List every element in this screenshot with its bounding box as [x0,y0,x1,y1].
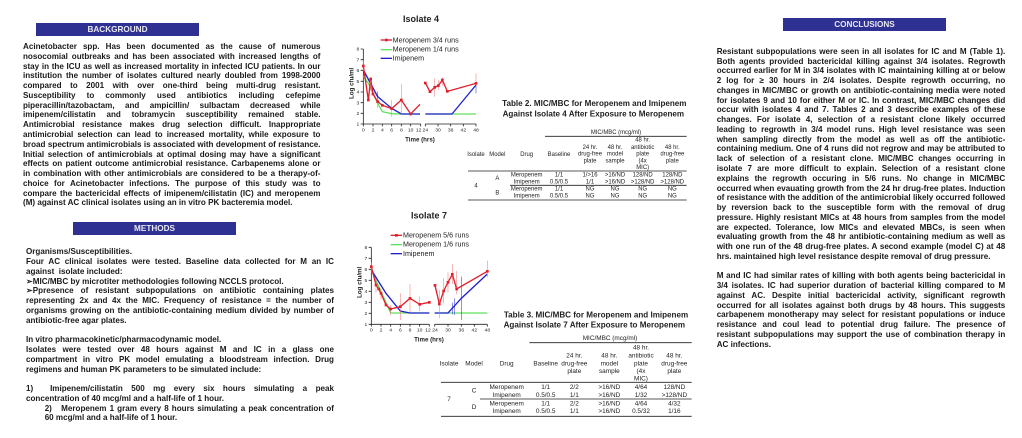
table 3 rows: Meropenem [490,401,524,408]
table 2 header: plate [584,159,597,165]
table 3 header: model [601,360,618,367]
series: meropenem 1/6 runs [371,270,487,313]
chart: isolate 4 [349,14,479,144]
table 3 title [504,311,688,330]
text block: methods: Four AC clinical isolates were tested. Baseline data collected for M an IC [26,257,334,266]
table 2 header: plate [636,152,650,158]
x tick labels: 30 [445,328,451,334]
table 3 rules [441,343,692,416]
text block: background: Initial selection of antimicrobials at optimal dosing may have a significant [23,150,320,159]
y tick labels: 1 [357,122,360,128]
table 3 title: Table 3. MIC/MBC for Meropenem and Imipenem [504,311,688,320]
x tick labels: 4 [389,328,392,334]
table 2 rows: >16/ND [605,173,625,179]
text block: background: antimicrobial selection can lead to increased mortality, while exposure to [23,130,320,139]
text block: conclusions: occurred earlier for M in 3/4 isolates with IC maintaining killing at or below [717,66,1005,75]
x tick labels: 8 [400,127,403,133]
x tick labels: 12 [425,328,431,334]
table 2 rows: >128/ND [661,179,684,185]
text block: methods: antibiotic-free agar plates. [26,316,127,325]
table 3 header: Isolate [440,360,459,367]
table 2 rows: Imipenem [514,179,540,185]
table 3 rows: 1/1 [570,408,579,415]
text block: background: Antimicrobial resistance makes drug selection difficult. Inappropriate [23,120,320,129]
table 2 header: drug-free [578,152,603,158]
table 2 rows: NG [611,194,620,200]
x tick labels: 4 [381,127,384,133]
text block: conclusions: lack of selection of a resistant clone. MIC/MBC changes occurring in [717,154,1005,163]
x tick labels: 48 [473,127,479,133]
text block: background: compare the bactericidal effects of imipenem/cilistatin (IC) and meropenem [23,189,320,198]
table 3 header: MIC/MBC (mcg/ml) [583,335,637,342]
text block: background: Acinetobacter spp. Has been documented as the cause of numerous [23,42,320,51]
table 3 header: plate [567,368,582,375]
text block: background: stay in the ICU as well as increased mortality in infected ICU patients. In our [23,62,320,71]
table 3 header: Baseline [533,360,558,367]
table 2 rows: Meropenem [511,187,543,193]
table 2 header: 24 hr. [583,145,598,151]
y tick labels: 4 [357,90,360,96]
text block: background: institution the number of isolates cultured nearly doubled from 1998-2000 [23,71,320,80]
heading: methods: METHODS [134,224,175,233]
text block: background: effects on patient outcome antimicrobial resistance. Carbapenems alone or [23,159,320,168]
series: meropenem 3/4 runs [363,61,476,117]
x tick labels: 10 [417,328,423,334]
text block: methods: 60 mcg/ml and a half-life of 1 hour. [45,413,177,422]
y tick labels: 1 [365,322,368,328]
table 3 rows: >16/ND [598,401,621,408]
text block: conclusions: of resistance with the addition of the antimicrobial likely occurred followed [717,193,1005,202]
x tick labels: 8 [409,328,412,334]
y tick labels: 7 [365,256,368,262]
table 2 rows: B [495,191,499,197]
text block: conclusions: isolate 7 are more difficult to explain. Selection of a resistant clone [717,164,1005,173]
table 3 rows: 2/2 [570,401,579,408]
text block: methods: Organisms/Susceptibilities. [26,247,132,256]
text block: conclusions: carbapenem monotherapy may select for resistant populations or induce [717,310,1005,319]
table 3 rows: 2/2 [570,384,579,391]
x tick labels: 6 [390,127,393,133]
text block: background: nosocomial outbreaks and has been associated with increased lengths of [23,52,320,61]
table 3 header [440,335,688,382]
table 2 rows: 0.5/0.5 [550,179,569,185]
table 2 rows: NG [586,187,595,193]
table 2 header: Model [489,152,505,158]
x tick labels: 24 [432,328,438,334]
table 3 rows: Imipenem [493,408,521,415]
table 3 rows: 0.5/0.5 [536,392,556,399]
table 2 title [502,99,686,118]
table 3 rows: 1/1 [541,384,551,391]
table 2 rows: A [495,176,499,182]
y tick labels: 6 [357,68,360,74]
text block: conclusions: M and IC had similar rates of killing with both agents being bactericidal in [717,271,1005,280]
table 3 rows: 4/64 [635,401,648,408]
table 2 rows: NG [668,194,677,200]
text block: conclusions: containing medium. One of 4 runs did not regrow and may be attributed to [717,144,1005,153]
heading: background [36,22,199,36]
series: meropenem 5/6 runs [371,261,487,320]
axis title: time: Time (hrs) [414,337,444,344]
axis title: log cfu: Log cfu/ml [357,266,364,298]
y tick labels [357,47,360,128]
table 3 rows: >16/ND [598,408,621,415]
x tick labels: 6 [399,328,402,334]
table 3 header: 48 hr. [601,352,618,359]
table 3 rows: 0.5/32 [632,408,650,415]
table 2 rows: >128/ND [631,179,654,185]
text block: conclusions: hrs. maintained high level resistance despite removal of drug pressure. [717,252,991,261]
table 3 rows: 0.5/0.5 [536,408,556,415]
text block: conclusions: Resistant subpopulations were seen in all isolates for IC and M (Table 1). [717,47,1005,56]
table 3 rows: 7 [447,396,451,403]
x tick labels [362,127,479,133]
chart: isolate 7 [357,210,490,344]
text block: methods: 1) Imipenem/cilistatin 500 mg every six hours simulating a peak [26,384,334,393]
text block: conclusions: 2 log for ≥ 30 hours in 2/4 isolates. Despite regrowth occurring, no [717,76,1005,85]
y tick labels: 5 [365,278,368,284]
table 2 header: drug-free [660,152,685,158]
text block: conclusions: are expected. Tolerance, low MICs and elevated MBCs, is seen when [717,223,1005,232]
table 3 header: 48 hr. [666,352,683,359]
x tick labels: 42 [461,127,466,133]
text block: conclusions: 3/4 isolates. IC had superior duration of bacterial killing compared to M [717,281,1005,290]
table 3 rows: >128/ND [662,392,687,399]
table 2 rows: NG [668,187,677,193]
legend [381,36,459,62]
table 3 header: plate [667,368,682,375]
table 2 rows: 1/1 [555,173,563,179]
text block: methods: Isolates were tested over 48 hours against M and IC in a glass one [26,345,334,354]
table 2 header: 48 hr. [635,138,650,144]
y tick labels: 8 [365,245,368,251]
table 2 rows: Imipenem [514,194,540,200]
x tick labels: 36 [448,127,454,133]
table 3 rows: Meropenem [490,384,524,391]
table 2 rows: NG [638,194,647,200]
text block: conclusions: for isolates 9 and 10 for either M or IC. In contrast, MIC/MBC changes did [717,96,1005,105]
y tick labels: 2 [365,311,368,317]
table 3 rows: Imipenem [493,392,521,399]
table 2 rows: >16/ND [605,179,625,185]
table 2 rows: 1/>16 [583,173,598,179]
table 3 rows: >16/ND [598,392,621,399]
table 3 rows: D [472,404,477,411]
y tick labels: 6 [365,267,368,273]
table 2 rows: 4 [474,183,478,189]
y tick labels: 7 [357,57,360,63]
legend: Imipenem [393,54,424,62]
text block: background: compared to 2001 with over one-third being multi-drug resistant. [23,81,320,90]
chart title: isolate 4: Isolate 4 [403,14,439,24]
x tick labels: 2 [372,127,375,133]
heading: conclusions [783,18,946,31]
text block: methods: ➢Ppresence of resistant subpopulations on antibiotic containing plates [26,286,334,295]
table 2 header: plate [666,159,679,165]
text block: conclusions: AC infections. [717,340,771,349]
table 3 header: MIC) [634,375,648,382]
table 2 title: Table 2. MIC/MBC for Meropenem and Imipenem [502,99,686,108]
legend: Meropenem 1/6 runs [403,241,469,249]
x tick labels [370,328,490,334]
text block: conclusions: occurred when evauating growth from the 24 hr drug-free plates. Induction [717,184,1005,193]
x tick labels: 2 [380,328,383,334]
table 3 rows: 4/32 [668,401,681,408]
text block: conclusions: evaluating growth from the 48 hr antibiotic-containing medium as well as [717,232,1005,241]
axes [369,247,487,327]
text block: methods: against isolate included: [26,267,123,276]
table 3 title: Against Isolate 7 After Exposure to Meropenem [504,321,685,330]
text block: background: in combination with other antimicrobials are considered to be a therapy-of- [23,169,320,178]
markers [362,65,477,115]
table 3 rows: >16/ND [598,384,621,391]
table 2 header: model [607,152,623,158]
y tick labels: 2 [357,111,360,117]
table 2 header: 48 hr. [608,145,623,151]
table 3 header: antibiotic [628,352,654,359]
table 3 header: Drug [500,360,514,367]
table 3 header: Model [465,360,483,367]
text block: methods: representing 2x and 4x the MIC. Frequency of resistance = the number of [26,296,334,305]
axis title: time: Time (hrs) [405,137,435,144]
table 2 rows: NG [611,187,620,193]
text block: conclusions: occur with isolates 4 and 7. Tables 2 and 3 describe examples of these [717,105,1005,114]
table 2 rows: 1/1 [555,187,563,193]
table 2 header: (4x [639,159,647,165]
text block: background: Susceptibility to commonly used antibiotics including cefepime [23,91,320,100]
legend: Meropenem 5/6 runs [403,232,469,240]
text block: conclusions: with one run of the 48 drug-free plates. A second example (model C) at 48 [717,242,1005,251]
table 2 rows: 0.5/0.5 [550,194,569,200]
table 3 [440,311,692,416]
table 2 header: 48 hr. [665,145,680,151]
text block: conclusions: explains the regrowth occuring in 5/6 runs. No change in MIC/MBC [717,174,1005,183]
table 2 rows: Meropenem [511,173,543,179]
table 3 rows: 4/64 [635,384,648,391]
table 2 header: Drug [520,152,533,158]
text block: methods [26,247,334,422]
text block: conclusions [716,47,1006,349]
table 2 header: antibiotic [631,145,654,151]
series: imipenem [371,270,487,320]
x tick labels: 0 [362,127,365,133]
axis title: log cfu: Log cfu/ml [349,67,356,99]
table 2 header: MIC/MBC (mcg/ml) [591,130,641,136]
table 3 header: drug-free [661,360,688,367]
table 3 header: (4x [637,368,646,375]
table 2 header: Baseline [548,152,571,158]
heading: methods [73,222,236,235]
text block: methods: compartment in vitro PK model emulating a bloodstream infection. Drug [26,355,334,364]
text block: methods: concentration of 40 mcg/ml and a half-life of 1 hour. [26,394,224,403]
text block: conclusions: resistance and coul lead to potential drug failure. The presence of [717,320,1005,329]
text block: conclusions: leading to regrowth in 3/4 model runs. High level resistance was seen [717,125,1005,134]
text block: methods: organisms growing on the antibiotic-containing medium divided by number of [26,306,334,315]
table 3 rows: 128/ND [663,384,686,391]
x tick labels: 48 [485,328,490,334]
y tick labels: 3 [357,100,360,106]
table 3 rows: 1/16 [668,408,681,415]
table 3 rows: 1/1 [541,401,551,408]
y tick labels: 5 [357,79,360,85]
text block: conclusions: occurred for all isolates against both drugs by 48 hours. This suggests [717,301,1005,310]
text block: conclusions: changes. For isolate 4, selection of a resistant clone likely occurred [717,115,1005,124]
table 3 rows: 1/32 [635,392,648,399]
x tick labels: 42 [472,328,477,334]
table 2 rows: 128/ND [662,173,682,179]
x tick labels: 12 [416,127,422,133]
table 2 header [467,130,685,171]
table 2 rows: 1/1 [586,179,594,185]
heading: conclusions: CONCLUSIONS [834,20,895,29]
table 3 header: sample [599,368,620,375]
x tick labels: 0 [370,328,373,334]
text block: methods: ➢MIC/MBC by microtiter methodologies following NCCLS protocol. [26,277,284,286]
table 2 rules [468,136,687,200]
text block: conclusions: Both agents provided bactericidal killing against 3/4 isolates. Regrowth [717,57,1005,66]
legend: Imipenem [403,250,434,258]
table 3 rows: 1/1 [570,392,579,399]
x tick labels: 36 [459,328,464,334]
table 3 header: plate [634,360,648,367]
table 3 header: 24 hr. [566,352,583,359]
y tick labels: 4 [365,289,368,295]
text block: conclusions: when sampling directly from the model as well as off the antibiotic- [717,135,1005,144]
chart title: isolate 7: Isolate 7 [411,210,447,220]
text block: background: piperacillin/tazobactam, and ampicillin/ sulbactam decreased while [23,101,320,110]
text block: methods: In vitro pharmacokinetic/pharmacodynamic model. [26,335,221,344]
text block: conclusions: resistant subpopulations may support the use of combination therapy in [717,330,1005,339]
y tick labels: 3 [365,300,368,306]
table 2 header: MIC) [636,165,649,171]
text block: background: broad spectrum antimicrobials is associated with development of resistance. [23,140,320,149]
text block: conclusions: by reversion back to the susceptible form with the removal of drug [717,203,1005,212]
text block: background [23,42,320,207]
text block: background: (M) against AC clinical isolates using an in vitro PK bacteremia model. [23,198,292,207]
table 3 header: 48 hr. [633,345,649,352]
markers [370,265,489,310]
table 2 header: sample [605,159,625,165]
text block: background: imipenem/cilistatin and tobramycin susceptibility remained stable. [23,110,320,119]
legend: Meropenem 3/4 runs [393,36,459,44]
text block: background: choice for Acinetobacter infections. The purpose of this study was to [23,179,320,188]
text block: conclusions: changes in MIC/MBC or growth on antibiotic-containing media were noted [717,86,1005,95]
table 2 rows: NG [638,187,647,193]
table 2 [467,99,687,200]
legend: Meropenem 1/4 runs [393,46,459,54]
table 2 header: Isolate [467,152,485,158]
text block: methods: 2) Meropenem 1 gram every 8 hours simulating a peak concentration of [45,404,334,413]
axes [361,49,476,126]
table 3 rows: C [472,387,477,394]
x tick labels: 24 [423,127,428,133]
text block: conclusions: pressure. Highly resistant MICs at 48 hours from samples from the model [717,213,1005,222]
text block: methods: regimens and human PK parameters to be simulated include: [26,365,261,374]
legend [391,232,469,258]
series: imipenem [363,70,476,114]
text block: conclusions: against AC. Despite initial bactericidal activity, significant regrowth [717,291,1005,300]
series: meropenem 1/4 runs [363,76,476,114]
x tick labels: 10 [408,127,414,133]
table 2 title: Against Isolate 4 After Exposure to Meropenem [503,109,684,118]
x tick labels: 30 [435,127,441,133]
table 2 rows: 128/ND [633,173,653,179]
table 3 header: drug-free [561,360,588,367]
heading: background: BACKGROUND [87,24,148,34]
y tick labels [365,245,368,328]
y tick labels: 8 [357,47,360,53]
table 2 rows: NG [586,194,595,200]
table 2 rows [474,173,684,200]
table 3 rows [447,384,687,415]
